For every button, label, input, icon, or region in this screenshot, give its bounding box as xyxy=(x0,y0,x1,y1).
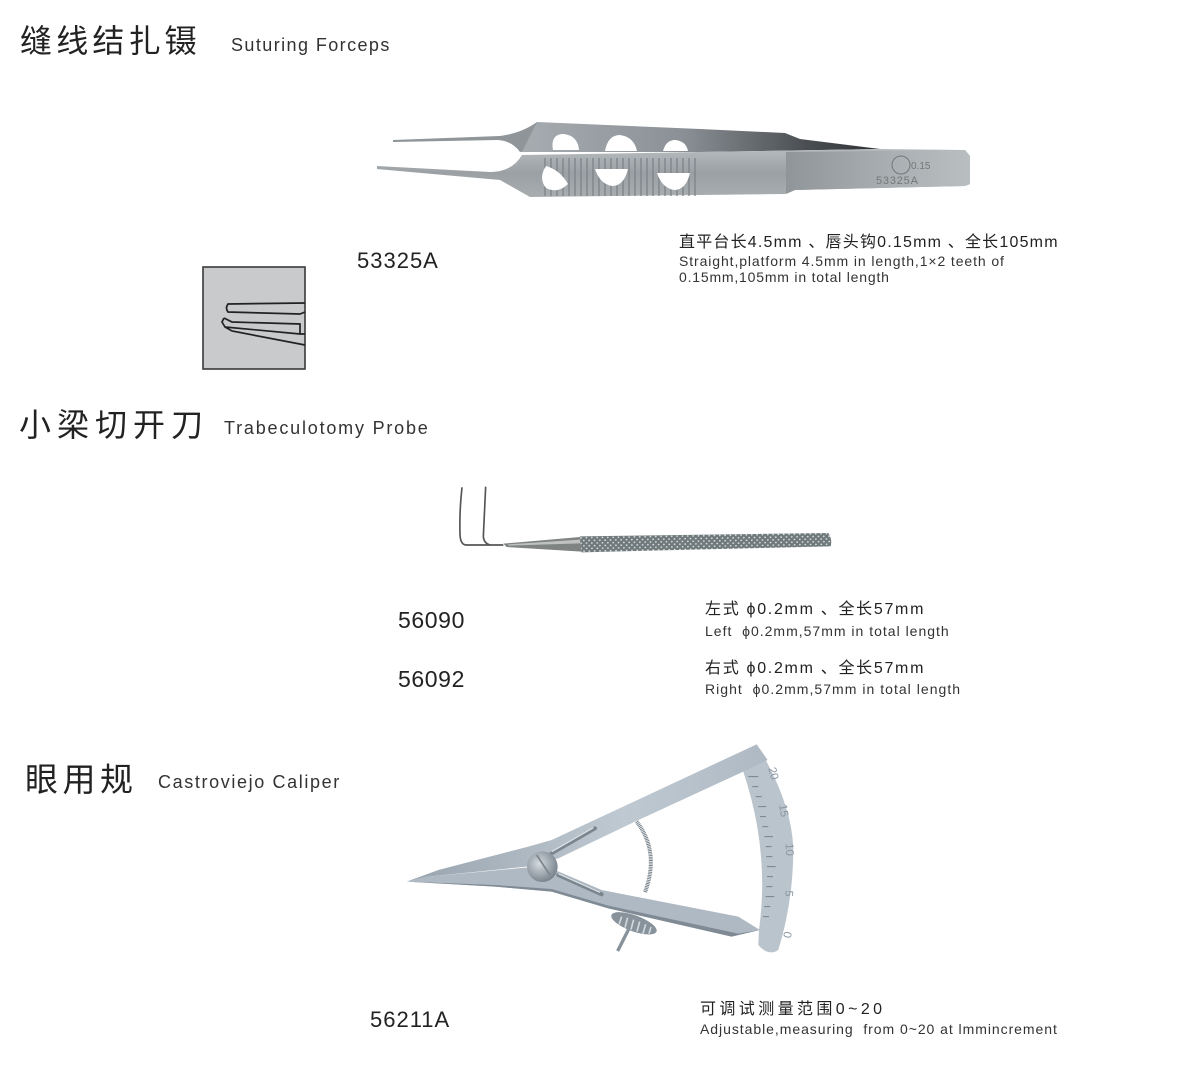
heading: suturing forceps: 缝线结扎镊 xyxy=(20,23,201,59)
photo: castroviejo caliper: 5 xyxy=(782,890,795,897)
description: 53325A: 0.15mm,105mm in total length xyxy=(679,269,890,285)
description: 53325A: Straight,platform 4.5mm in length,1×2 teeth of xyxy=(679,253,1005,269)
code: 56090: 56090 xyxy=(398,607,465,633)
heading english: suturing forceps: Suturing Forceps xyxy=(231,35,391,55)
holes xyxy=(552,134,688,151)
end block xyxy=(786,150,970,194)
heading: trabeculotomy probe: 小梁切开刀 xyxy=(19,407,209,443)
description: 56211A xyxy=(700,1000,1058,1037)
upper tine xyxy=(393,122,537,152)
description: 56090: Left ϕ0.2mm,57mm in total length xyxy=(705,623,950,639)
heading english: trabeculotomy probe: Trabeculotomy Probe xyxy=(224,418,430,438)
photo: suturing forceps: 53325A xyxy=(876,175,919,187)
lower tine and body xyxy=(377,149,970,197)
description: 56092 xyxy=(705,659,961,697)
thumb wheel xyxy=(618,927,630,951)
wire arc xyxy=(637,822,651,892)
description: 53325A xyxy=(679,233,1059,285)
description: 56211A: Adjustable,measuring from 0~20 at lmmincrement xyxy=(700,1021,1058,1037)
description: 56090 xyxy=(705,600,950,639)
pivot screw xyxy=(527,851,558,882)
photo: castroviejo caliper: 15 xyxy=(776,803,790,818)
lower arm xyxy=(407,868,760,937)
ribs xyxy=(545,158,695,196)
photo: castroviejo caliper: 10 xyxy=(783,843,795,856)
upper jaw xyxy=(522,122,880,152)
description: 56211A: 可调试测量范围0~20 xyxy=(700,1001,885,1018)
code: 56092: 56092 xyxy=(398,666,465,692)
photo: suturing forceps: 0.15 xyxy=(911,161,931,172)
scale arc xyxy=(743,744,793,952)
description: 53325A: 直平台长4.5mm 、唇头钩0.15mm 、全长105mm xyxy=(679,234,1059,251)
heading: castroviejo caliper: 眼用规 xyxy=(25,761,138,798)
description: 56090: 左式 ϕ0.2mm 、全长57mm xyxy=(705,601,925,618)
engraved mark xyxy=(892,156,910,174)
code: 53325A: 53325A xyxy=(357,248,439,273)
description: 56092: Right ϕ0.2mm,57mm in total length xyxy=(705,681,961,697)
photo: castroviejo caliper: 20 xyxy=(765,766,780,781)
photo: castroviejo caliper: 0 xyxy=(780,930,793,939)
code: 56211A: 56211A xyxy=(370,1007,450,1032)
slots xyxy=(552,828,595,853)
description: 56092: 右式 ϕ0.2mm 、全长57mm xyxy=(705,660,925,677)
upper arm xyxy=(407,744,768,882)
heading english: castroviejo caliper: Castroviejo Caliper xyxy=(158,772,341,792)
